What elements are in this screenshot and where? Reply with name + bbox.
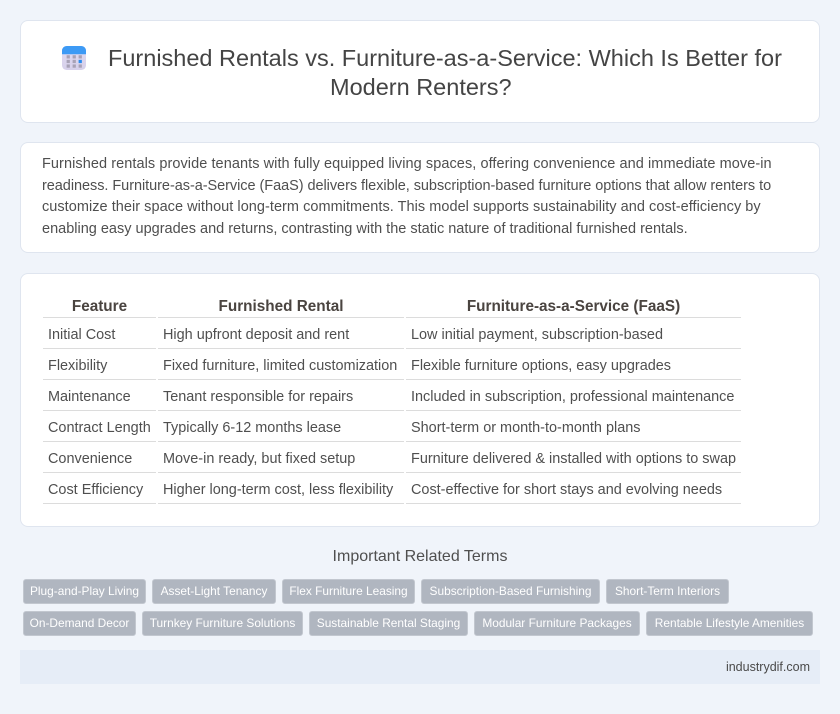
row: cost efficiency — [43, 482, 741, 504]
related terms heading: Important Related Terms — [333, 548, 507, 565]
row: flexibility: Flexible furniture options, easy upgrades — [411, 358, 671, 374]
title: Modern Renters? — [330, 74, 512, 100]
related terms tags: Subscription-Based Furnishing — [430, 584, 591, 598]
related terms tags: Modular Furniture Packages — [482, 616, 632, 630]
related terms tags: Sustainable Rental Staging — [317, 616, 460, 630]
table header row: Furnished Rental — [219, 298, 343, 315]
footer source text: industrydif.com — [726, 660, 810, 674]
row: initial cost: Initial Cost — [48, 327, 115, 343]
intro text: customize their space without long-term commitments. This model supports sustainability and cost-efficiency by — [42, 199, 761, 215]
row: maintenance: Tenant responsible for repairs — [163, 389, 353, 405]
row: initial cost: High upfront deposit and rent — [163, 327, 349, 343]
icon: calendar grid — [62, 46, 86, 70]
table header row: Feature — [72, 298, 127, 315]
related terms tags: On-Demand Decor — [30, 616, 129, 630]
row: cost efficiency: Cost-effective for short stays and evolving needs — [411, 482, 722, 498]
row: maintenance — [43, 389, 741, 411]
intro text: readiness. Furniture-as-a-Service (FaaS) delivers flexible, subscription-based furniture options that allow renters to — [42, 178, 771, 194]
intro text: enabling easy upgrades and returns, contrasting with the static nature of traditional furnished rentals. — [42, 220, 688, 236]
intro text: Furnished rentals provide tenants with fully equipped living spaces, offering convenience and immediate move-in — [42, 156, 772, 172]
title: Furnished Rentals vs. Furniture-as-a-Service: Which Is Better for — [108, 45, 782, 71]
row: contract length: Contract Length — [48, 420, 151, 436]
comparison table — [43, 298, 741, 504]
row: contract length: Short-term or month-to-month plans — [411, 420, 640, 436]
row: contract length — [43, 420, 741, 442]
header panel — [20, 20, 820, 123]
row: initial cost: Low initial payment, subscription-based — [411, 327, 663, 343]
related terms tags — [23, 579, 813, 636]
title — [108, 45, 782, 100]
panel: comparison table — [20, 273, 820, 527]
row: cost efficiency: Cost Efficiency — [48, 482, 143, 498]
related terms tags: Asset-Light Tenancy — [161, 584, 267, 598]
row: maintenance: Included in subscription, professional maintenance — [411, 389, 734, 405]
related terms tags: Rentable Lifestyle Amenities — [655, 616, 804, 630]
related terms tags: Turnkey Furniture Solutions — [150, 616, 295, 630]
table header row: Furniture-as-a-Service (FaaS) — [467, 298, 680, 315]
row: initial cost — [43, 327, 741, 349]
row: flexibility: Flexibility — [48, 358, 107, 374]
row: flexibility — [43, 358, 741, 380]
row: convenience: Convenience — [48, 451, 132, 467]
intro text — [42, 156, 772, 236]
row: cost efficiency: Higher long-term cost, less flexibility — [163, 482, 393, 498]
row: convenience: Furniture delivered & installed with options to swap — [411, 451, 736, 467]
row: convenience: Move-in ready, but fixed setup — [163, 451, 355, 467]
footer bar — [20, 650, 820, 684]
table header row — [43, 298, 741, 318]
row: convenience — [43, 451, 741, 473]
related terms tags: Short-Term Interiors — [615, 584, 720, 598]
row: contract length: Typically 6-12 months lease — [163, 420, 341, 436]
related terms tags: Plug-and-Play Living — [30, 584, 139, 598]
row: maintenance: Maintenance — [48, 389, 131, 405]
panel: intro paragraph — [20, 142, 820, 253]
row: flexibility: Fixed furniture, limited customization — [163, 358, 397, 374]
related terms tags: Flex Furniture Leasing — [289, 584, 408, 598]
